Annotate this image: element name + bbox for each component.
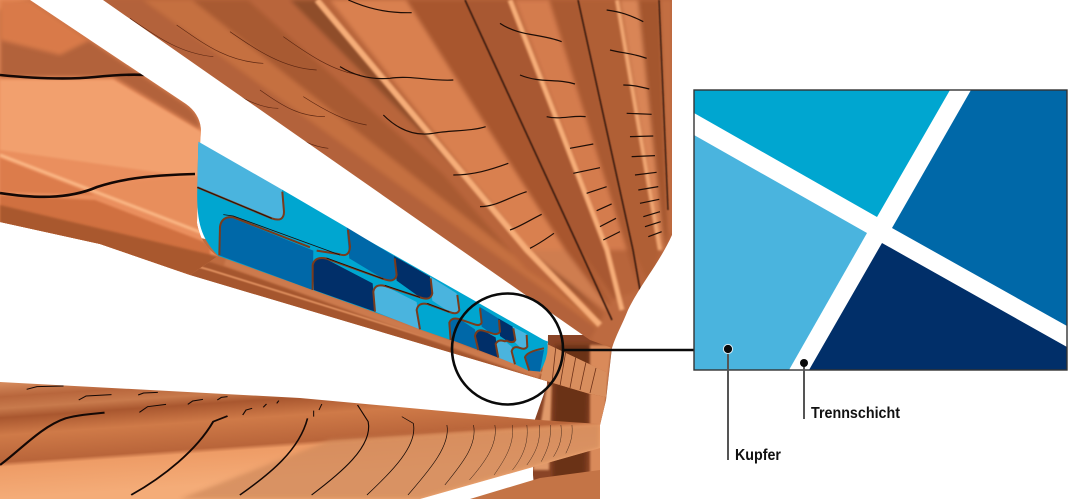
- copper cut-away conductor at left: [0, 0, 230, 285]
- inset panel: magnified cross-section: [694, 90, 1067, 370]
- copper lower conductor with seams: [0, 380, 605, 499]
- copper upper fan of conductors: [90, 0, 690, 360]
- callout: Kupfer: Kupfer: [735, 447, 781, 464]
- magnifier circle and connector: [452, 294, 694, 404]
- blue separated strand strip: [197, 142, 548, 372]
- right cross-section quadrant: [892, 90, 1067, 326]
- copper seam lines on the cut-away conductor: [0, 75, 195, 197]
- callout: Trennschicht: Trennschicht: [811, 405, 900, 422]
- bottom cross-section quadrant: [809, 243, 1067, 370]
- seam lines on lower conductor: [0, 386, 572, 495]
- upper row of strand blocks: [197, 142, 548, 353]
- left cross-section quadrant: [694, 135, 867, 370]
- callout: Trennschicht: [800, 359, 900, 422]
- copper lower band beneath the blue strip: [0, 222, 606, 397]
- lower row of strand blocks: [219, 218, 544, 372]
- copper strand at bottom right: [470, 470, 600, 499]
- strip base: [197, 144, 548, 372]
- top cross-section quadrant: [694, 90, 950, 217]
- brown separation layers between blocks: [197, 187, 544, 371]
- callout: Kupfer: [723, 344, 781, 464]
- copper central column: [533, 335, 612, 480]
